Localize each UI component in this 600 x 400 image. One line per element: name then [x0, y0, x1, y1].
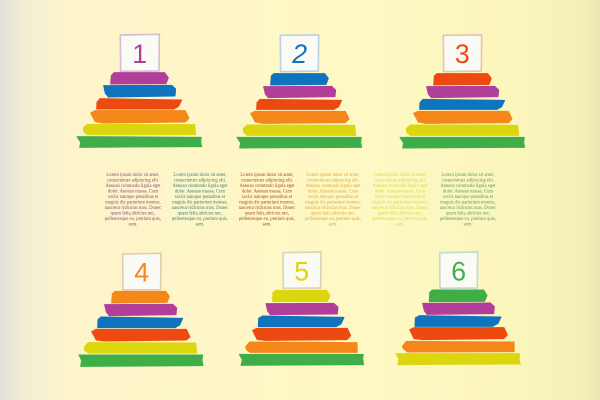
text block 4: nascetur ridiculus mus. Donec [305, 206, 361, 211]
pyramid 3 [400, 35, 525, 148]
text block 6: magnis dis parturient montes, [440, 200, 496, 206]
card: number 4: 4 [134, 257, 149, 287]
tier: blue [415, 316, 501, 326]
pyramid 5 [239, 252, 364, 365]
text block 1: quam felis,ultricies nec, [111, 212, 155, 216]
card: number 5: 5 [294, 256, 309, 286]
text block 3: consectetuer adipiscing elit. [241, 178, 293, 184]
text block 2: Aenean commodo ligula eget [172, 184, 228, 189]
tier: green [400, 137, 525, 148]
tier: red [434, 74, 491, 85]
text block 3: Aenean commodo ligula eget [239, 184, 295, 189]
text block 4: sociis natoque penatibus et [308, 195, 359, 200]
text block 6: sociis natoque penatibus et [443, 195, 494, 200]
tier: red [92, 329, 190, 341]
text block 1: pellentesque eu, pretium quis, [105, 217, 161, 222]
text block 2 [172, 173, 228, 228]
text block 4: consectetuer adipiscing elit. [307, 178, 359, 184]
text block 3: sociis natoque penatibus et [242, 195, 293, 200]
pyramid 6 [396, 252, 520, 365]
tier: purple [423, 303, 494, 314]
tier: yellow [406, 125, 519, 135]
pyramid 1 [77, 34, 202, 147]
text block 1: Lorem ipsum dolor sit amet, [106, 173, 160, 178]
text block 4: sem. [329, 222, 337, 228]
tier: yellow [396, 354, 520, 365]
tier: orange [91, 111, 189, 123]
text block 5 [372, 173, 428, 228]
text block 6: quam felis,ultricies nec, [446, 212, 490, 216]
text block 3: pellentesque eu, pretium quis, [239, 217, 295, 222]
tier: purple [266, 303, 338, 315]
text block 5: pellentesque eu, pretium quis, [372, 217, 428, 222]
text block 3: dolor. Aenean massa. Cum [242, 190, 292, 194]
text block 1 [105, 173, 161, 228]
text block 2: dolor. Aenean massa. Cum [175, 190, 225, 194]
tier: red [253, 328, 351, 340]
tier: blue [258, 316, 344, 327]
tier: purple [427, 86, 499, 98]
text block 2: pellentesque eu, pretium quis, [172, 217, 228, 222]
text block 6: Lorem ipsum dolor sit amet, [441, 173, 495, 178]
tier: yellow [83, 124, 196, 135]
text block 1: sociis natoque penatibus et [108, 195, 159, 200]
card: number 1: 1 [132, 39, 147, 69]
text block 1: sem. [129, 222, 137, 228]
text block 6: dolor. Aenean massa. Cum [443, 190, 493, 194]
tier: purple [111, 73, 168, 84]
text block 4: dolor. Aenean massa. Cum [308, 190, 358, 194]
tier: yellow [243, 125, 356, 135]
text block 5: dolor. Aenean massa. Cum [375, 190, 425, 194]
tier: yellow [84, 343, 197, 353]
text block 5: consectetuer adipiscing elit. [374, 178, 426, 184]
tier: purple [105, 304, 177, 316]
tier: green [77, 137, 202, 147]
tier: red [257, 99, 342, 109]
text block 2: quam felis,ultricies nec, [178, 212, 222, 216]
text block 5: sem. [396, 222, 404, 228]
tier: red [410, 328, 507, 340]
pyramid 2 [237, 35, 362, 148]
text block 1: nascetur ridiculus mus. Donec [105, 206, 161, 211]
text block 6: consectetuer adipiscing elit. [442, 178, 494, 184]
tier: green [79, 355, 203, 366]
tier: green [429, 290, 487, 302]
text block 1: consectetuer adipiscing elit. [107, 178, 159, 184]
text block 5: magnis dis parturient montes, [372, 200, 428, 206]
text block 2: sem. [196, 222, 204, 228]
text block 6: nascetur ridiculus mus. Donec [440, 206, 496, 211]
text block 3: Lorem ipsum dolor sit amet, [240, 173, 294, 178]
text block 5: sociis natoque penatibus et [375, 195, 426, 200]
tier: blue [271, 74, 328, 85]
text block 2: Lorem ipsum dolor sit amet, [173, 173, 227, 178]
card: number 3: 3 [455, 39, 470, 69]
text block 3 [239, 173, 295, 228]
text block 4 [305, 173, 361, 228]
tier: green [237, 137, 362, 148]
card: number 2: 2 [291, 39, 307, 69]
tier: blue [420, 99, 505, 109]
tier: orange [251, 111, 349, 123]
text block 6: Aenean commodo ligula eget [440, 184, 496, 189]
tier: green [239, 354, 364, 365]
text block 4: pellentesque eu, pretium quis, [305, 217, 361, 222]
text block 1: magnis dis parturient montes, [105, 200, 161, 206]
text block 6 [440, 173, 496, 228]
text block 5: Aenean commodo ligula eget [372, 184, 428, 189]
tier: orange [246, 342, 357, 352]
tier: orange [112, 291, 169, 303]
text block 4: quam felis,ultricies nec, [311, 212, 355, 216]
text block 5: nascetur ridiculus mus. Donec [372, 206, 428, 211]
text block 2: consectetuer adipiscing elit. [174, 178, 226, 184]
pyramid 4 [79, 253, 203, 366]
text block 4: Aenean commodo ligula eget [305, 184, 361, 189]
tier: red [97, 99, 182, 109]
text block 4: magnis dis parturient montes, [305, 200, 361, 206]
text block 6: sem. [464, 222, 472, 228]
text block 3: nascetur ridiculus mus. Donec [239, 206, 295, 211]
text block 2: magnis dis parturient montes, [172, 200, 228, 206]
text block 5: Lorem ipsum dolor sit amet, [373, 173, 427, 178]
text block 1: dolor. Aenean massa. Cum [108, 190, 158, 194]
text block 2: nascetur ridiculus mus. Donec [172, 206, 228, 211]
text block 1: Aenean commodo ligula eget [105, 184, 161, 189]
text block 3: sem. [263, 222, 271, 228]
card: number 6: 6 [451, 256, 466, 286]
tier: blue [98, 317, 183, 328]
tier: blue [104, 85, 176, 97]
tier: purple [264, 86, 336, 98]
text block 5: quam felis,ultricies nec, [378, 212, 422, 216]
text block 3: quam felis,ultricies nec, [245, 212, 289, 216]
text block 6: pellentesque eu, pretium quis, [440, 217, 496, 222]
text block 4: Lorem ipsum dolor sit amet, [306, 173, 360, 178]
tier: yellow [273, 290, 330, 302]
text block 3: magnis dis parturient montes, [239, 200, 295, 206]
tier: orange [414, 111, 512, 123]
tier: orange [402, 341, 514, 352]
text block 2: sociis natoque penatibus et [175, 195, 226, 200]
